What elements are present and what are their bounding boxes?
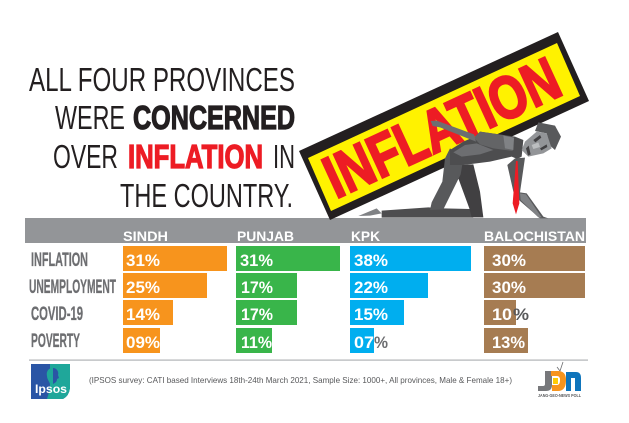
row label: covid-19: COVID-19 <box>31 303 83 325</box>
bars: Sindh <box>123 246 227 353</box>
icon: Ipsos logo: Ipsos <box>35 382 67 396</box>
title: OVER <box>53 139 118 176</box>
bars: Sindh: 25% <box>126 278 160 297</box>
header band <box>25 218 586 244</box>
bars: Punjab: 17% <box>241 305 273 324</box>
man <box>358 121 561 218</box>
bars: Punjab: 17% <box>241 278 273 297</box>
icon: JDN poll logo: JANG-GEO-NEWS POLL <box>538 393 581 398</box>
row label: unemployment: UNEMPLOYMENT <box>29 276 116 298</box>
title <box>29 62 295 215</box>
header band: KPK <box>351 228 380 244</box>
title: CONCERNED <box>133 100 295 137</box>
row label: poverty: POVERTY <box>31 330 80 352</box>
ground leg <box>382 207 473 218</box>
bars: Balochistan <box>484 246 585 353</box>
bars: Balochistan: 10 <box>492 305 512 324</box>
icon: JDN poll logo <box>538 362 581 398</box>
bars: KPK: 15% <box>354 305 388 324</box>
bars: KPK: 22% <box>354 278 388 297</box>
row label: inflation: INFLATION <box>31 249 88 271</box>
header band: BALOCHISTAN <box>484 228 585 244</box>
bars: KPK: 38% <box>354 251 388 270</box>
upper arm <box>474 132 514 151</box>
header band: SINDH <box>123 228 168 244</box>
title: IN <box>273 139 295 176</box>
tie <box>513 161 519 214</box>
bars: KPK <box>350 246 471 353</box>
bars: Balochistan: 30% <box>492 278 526 297</box>
title: THE COUNTRY. <box>120 178 293 215</box>
bars: Sindh: 09% <box>126 333 160 352</box>
icon: Ipsos logo <box>31 364 70 399</box>
title: ALL FOUR PROVINCES <box>29 62 295 99</box>
bars: Balochistan: 30% <box>492 251 526 270</box>
source note: (IPSOS survey: CATI based Interviews 18th-24th March 2021, Sample Size: 1000+, All provinces, Male & Female 18+) <box>89 375 512 385</box>
shoe <box>358 208 382 216</box>
torso <box>450 132 523 165</box>
lower arm <box>507 158 548 218</box>
near thigh <box>430 148 463 210</box>
bars: Punjab: 11% <box>241 333 272 352</box>
bars: Punjab <box>236 246 340 353</box>
back leg <box>458 164 483 217</box>
bars: KPK: 07 <box>354 333 374 352</box>
title: INFLATION <box>128 139 263 176</box>
face <box>522 132 552 157</box>
bars: Sindh: 14% <box>126 305 160 324</box>
bars: KPK: % <box>374 333 388 352</box>
raised forearm and hand <box>431 121 476 142</box>
illustration: man pushing inflation sign <box>299 32 589 220</box>
title: WERE <box>55 100 125 137</box>
inflation sign: INFLATION <box>313 45 570 211</box>
bars: Punjab: 31% <box>240 251 273 270</box>
bars: Sindh: 31% <box>126 251 160 270</box>
bars: Balochistan: % <box>513 305 529 324</box>
header band: PUNJAB <box>237 228 294 244</box>
bars: Balochistan: 13% <box>492 333 525 352</box>
hair <box>535 122 561 150</box>
